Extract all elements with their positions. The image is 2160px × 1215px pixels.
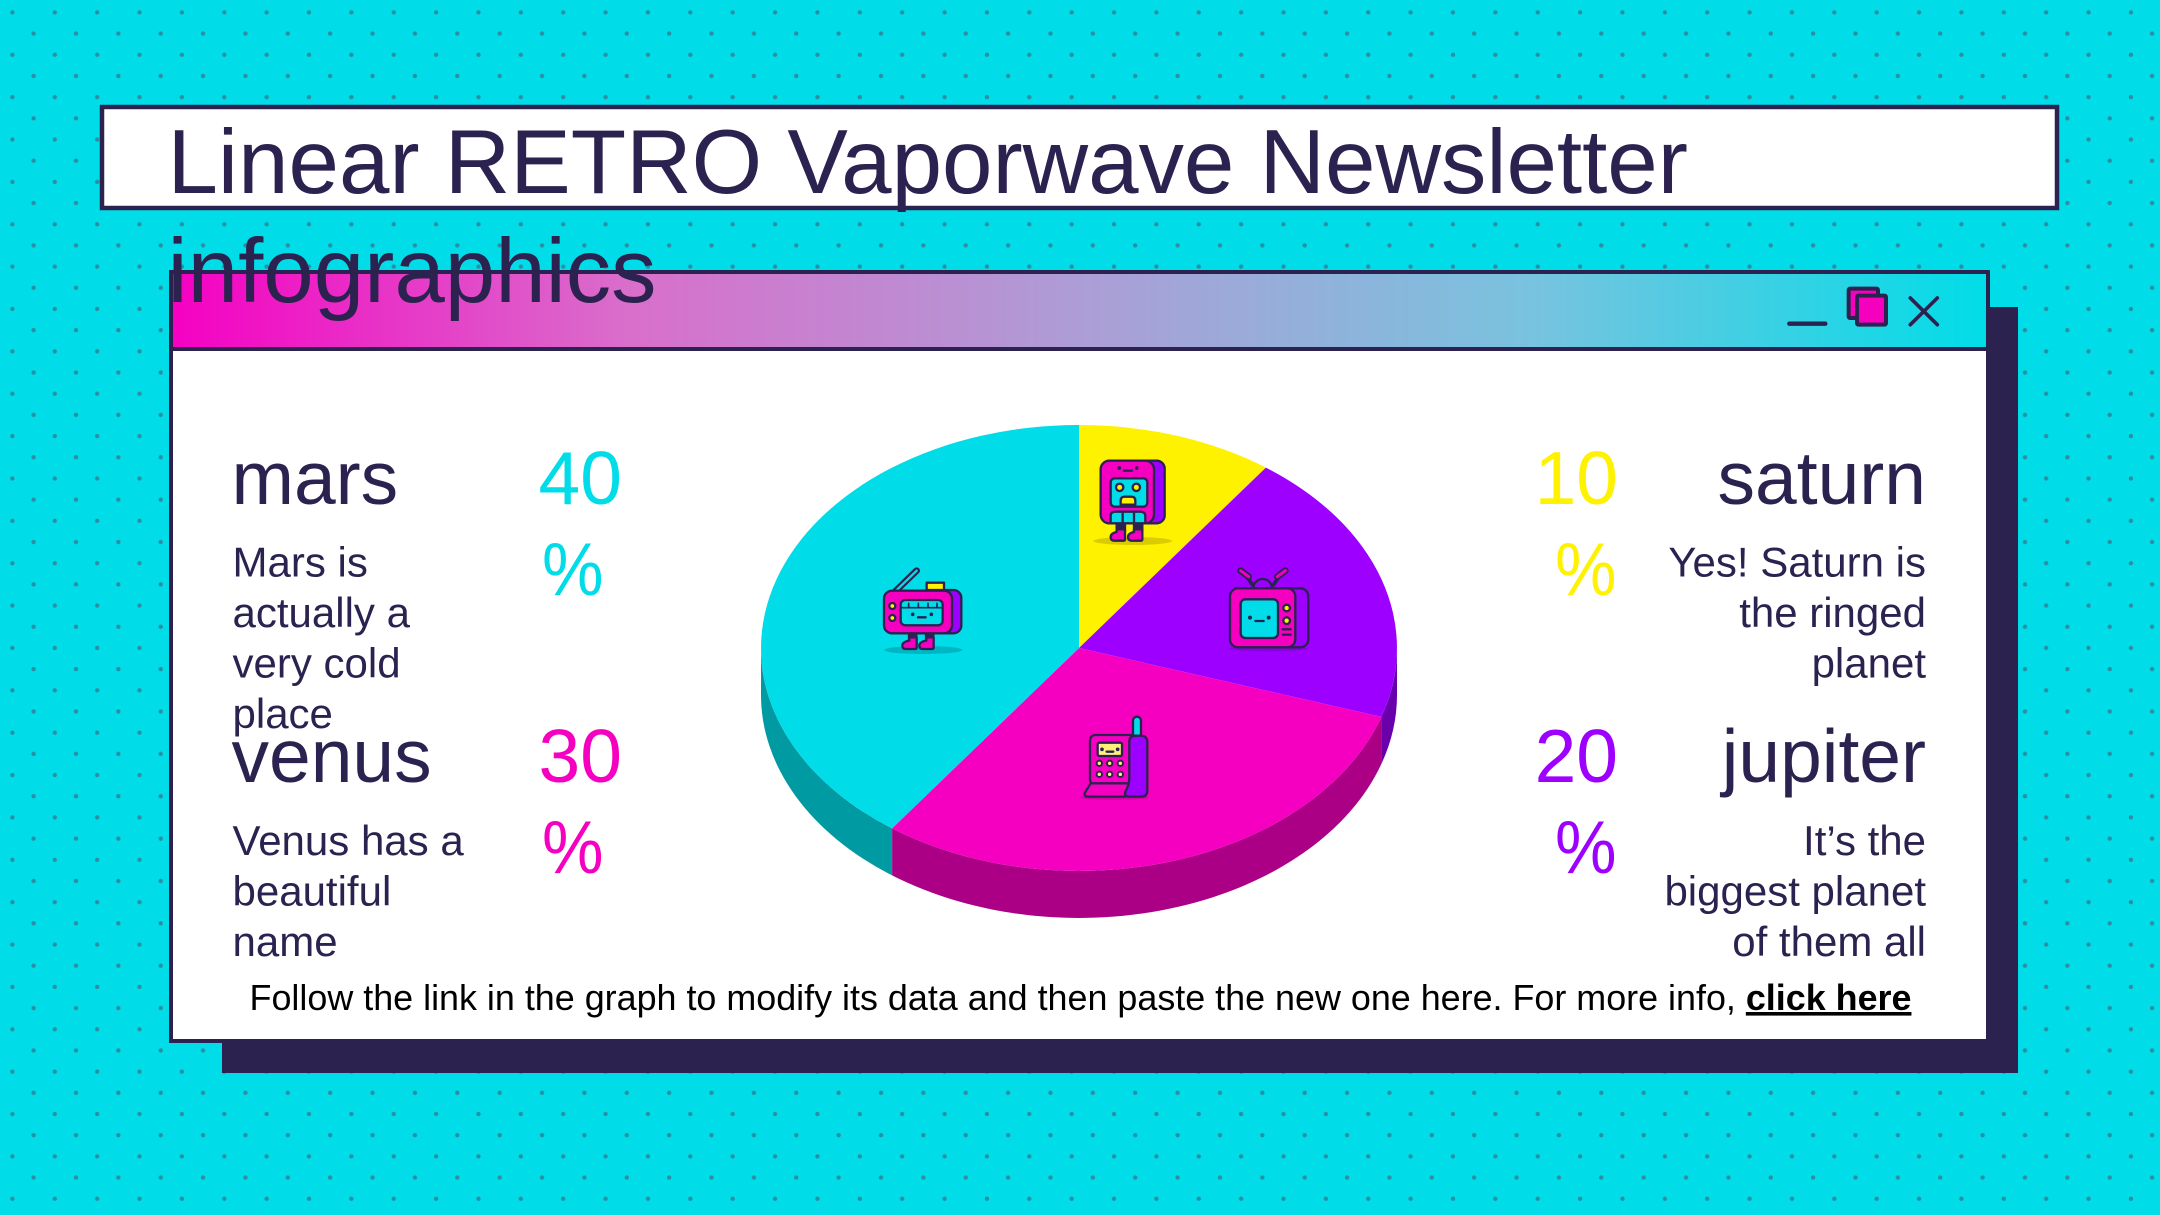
percent: mars 40%: % [542,527,604,611]
title box [102,107,2057,208]
text block: venus: beautiful [232,868,391,914]
percent: mars 40%: 40 [538,436,622,520]
percent: saturn 10%: 10 [1535,436,1618,520]
percent: jupiter 20%: % [1555,805,1616,889]
title [168,112,1688,322]
icon: window controls [1789,289,1937,325]
text block: jupiter [1664,714,1926,965]
percent: venus 30%: % [542,805,604,889]
pie chart [761,425,1397,918]
slice: mars 40% [761,425,1079,828]
title: Linear RETRO Vaporwave Newsletter [168,112,1688,213]
text block: saturn: the ringed [1739,589,1926,636]
slice side: purple [1381,648,1397,764]
text block: mars: very cold [232,640,401,686]
percent: saturn 10% [1535,436,1618,611]
text block: saturn [1668,436,1926,686]
title: infographics [168,221,656,322]
percent: jupiter 20%: 20 [1535,714,1618,798]
text block: mars: Mars is [232,538,368,586]
slice: jupiter 20% [1079,468,1397,717]
percent: saturn 10%: % [1555,527,1616,611]
text block: jupiter: biggest planet [1664,868,1926,914]
icon: robot [1093,461,1172,545]
text block: jupiter: It’s the [1803,817,1926,864]
text block: venus: venus [232,714,432,798]
slice side: magenta [892,717,1381,918]
slice: saturn 10% [1079,425,1266,648]
percent: venus 30% [538,714,622,889]
text block: mars: mars [232,436,398,520]
percent: mars 40% [538,436,622,611]
window title bar [171,272,1988,349]
text block: mars: actually a [232,589,411,636]
icon: tv [1228,571,1308,651]
footer note: Follow the link in the graph to modify its data and then paste the new one here. For more info, click here [250,978,1911,1018]
text block: mars [232,436,411,737]
icon: phone [1080,717,1150,800]
text block: jupiter: jupiter [1720,714,1926,798]
slice: venus 30% [892,648,1381,871]
icon: radio [884,571,963,654]
text block: venus [232,714,464,965]
text block: saturn: planet [1812,640,1926,686]
text block: mars: place [232,690,333,737]
text block: venus: Venus has a [232,817,464,864]
window shadow [222,307,2018,1073]
panel: window [171,272,1988,1041]
text block: saturn: saturn [1718,436,1926,520]
percent: jupiter 20% [1535,714,1618,889]
text block: venus: name [232,918,338,965]
percent: venus 30%: 30 [538,714,622,798]
text block: saturn: Yes! Saturn is [1668,538,1926,586]
slice side: cyan [761,648,892,875]
text block: jupiter: of them all [1732,918,1926,965]
